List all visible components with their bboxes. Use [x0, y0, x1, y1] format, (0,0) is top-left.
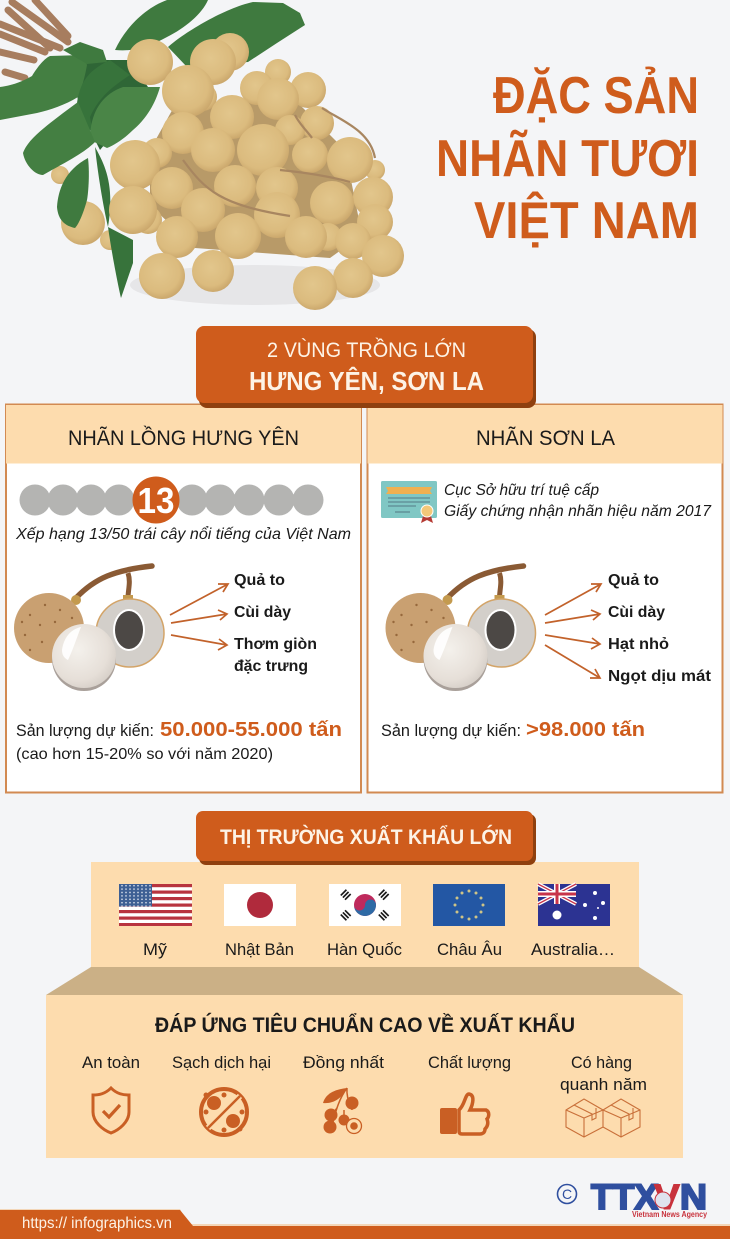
features list: Cùi dày	[234, 604, 291, 621]
flag: Australia	[538, 884, 610, 926]
standard labels: quanh năm	[560, 1075, 647, 1094]
logo: TTXVN: Vietnam News Agency	[632, 1210, 707, 1219]
illustration: longan bunch	[0, 0, 404, 310]
logo: TTXVN: V	[654, 1178, 681, 1217]
arrows	[170, 584, 228, 650]
features list	[608, 572, 712, 685]
arrows	[545, 584, 601, 678]
heading: Hưng Yên: NHÃN LỒNG HƯNG YÊN	[68, 426, 299, 450]
ranking dots	[20, 476, 324, 524]
heading: Sơn La	[368, 405, 722, 464]
standard labels	[82, 1053, 647, 1094]
icon: shield	[93, 1088, 129, 1133]
ranking text: Xếp hạng 13/50 trái cây nổi tiếng của Việt Nam	[15, 525, 351, 543]
features list: Ngọt dịu mát	[608, 668, 712, 685]
banner: growing regions: HƯNG YÊN, SƠN LA	[249, 366, 484, 396]
production: (cao hơn 15-20% so với năm 2020)	[16, 746, 273, 763]
standard labels: Sạch dịch hại	[172, 1053, 271, 1072]
standard labels: Đồng nhất	[303, 1053, 384, 1072]
flag: USA	[119, 884, 192, 926]
title: NHÃN TƯƠI	[436, 129, 699, 188]
banner: export markets	[196, 811, 536, 865]
title: VIỆT NAM	[474, 191, 699, 250]
icon: no pests	[201, 1089, 247, 1135]
features list: Quả to	[234, 572, 285, 589]
logo: TTXVN: N	[680, 1178, 707, 1217]
flag labels: Nhật Bản	[225, 940, 294, 959]
features list	[234, 572, 317, 675]
production: Sản lượng dự kiến:	[381, 722, 521, 740]
heading: Hưng Yên	[6, 405, 361, 464]
production	[381, 719, 645, 741]
flag labels: Australia…	[531, 940, 615, 959]
banner: growing regions: 2 VÙNG TRỒNG LỚN	[267, 338, 466, 362]
flag labels: Mỹ	[143, 940, 168, 959]
panel: Hưng Yên longan	[6, 404, 361, 792]
title	[436, 66, 699, 250]
footer bar: https:// infographics.vn	[22, 1215, 172, 1232]
features list: Thơm giòn	[234, 636, 317, 653]
banner: export markets: THỊ TRƯỜNG XUẤT KHẨU LỚN	[220, 825, 512, 849]
flag labels: Châu Âu	[437, 940, 502, 959]
icon: thumbs up	[440, 1094, 489, 1134]
production: 50.000-55.000 tấn	[160, 719, 342, 741]
title: ĐẶC SẢN	[493, 66, 699, 125]
footer bar	[0, 1209, 730, 1239]
features list: Hạt nhỏ	[608, 636, 669, 653]
logo: TTXVN: TTX	[591, 1178, 659, 1217]
features list: đặc trưng	[234, 658, 308, 675]
flag labels: Hàn Quốc	[327, 940, 402, 959]
logo: TTXVN: C	[562, 1186, 572, 1202]
production: Sản lượng dự kiến:	[16, 722, 154, 740]
features list: Quả to	[608, 572, 659, 589]
flag: South Korea	[329, 884, 401, 926]
icon: boxes	[566, 1099, 640, 1137]
standard labels: Chất lượng	[428, 1053, 511, 1072]
certificate text	[444, 482, 712, 520]
heading: Sơn La: NHÃN SƠN LA	[476, 426, 615, 450]
flag labels	[143, 940, 615, 959]
heading: ĐÁP ỨNG TIÊU CHUẨN CAO VỀ XUẤT KHẨU	[155, 1013, 575, 1037]
panel: Sơn La longan	[368, 404, 722, 792]
flag: EU	[433, 884, 505, 926]
logo: TTXVN	[558, 1178, 707, 1219]
standard labels: An toàn	[82, 1053, 140, 1072]
icon: longan branch	[323, 1088, 362, 1134]
ranking dots: 13	[138, 480, 174, 521]
icon: certificate	[381, 481, 437, 523]
panel: export markets	[91, 862, 639, 967]
illustration: longan Hưng Yên	[14, 566, 164, 691]
illustration: longan Sơn La	[386, 566, 536, 691]
certificate text: Cục Sở hữu trí tuệ cấp	[444, 482, 599, 499]
panel: export standards	[46, 967, 683, 1158]
flag: Japan	[224, 884, 296, 926]
certificate text: Giấy chứng nhận nhãn hiệu năm 2017	[444, 503, 712, 520]
production	[16, 719, 342, 763]
production: >98.000 tấn	[526, 719, 645, 741]
banner: growing regions	[196, 326, 536, 408]
features list: Cùi dày	[608, 604, 665, 621]
standard labels: Có hàng	[571, 1053, 632, 1072]
